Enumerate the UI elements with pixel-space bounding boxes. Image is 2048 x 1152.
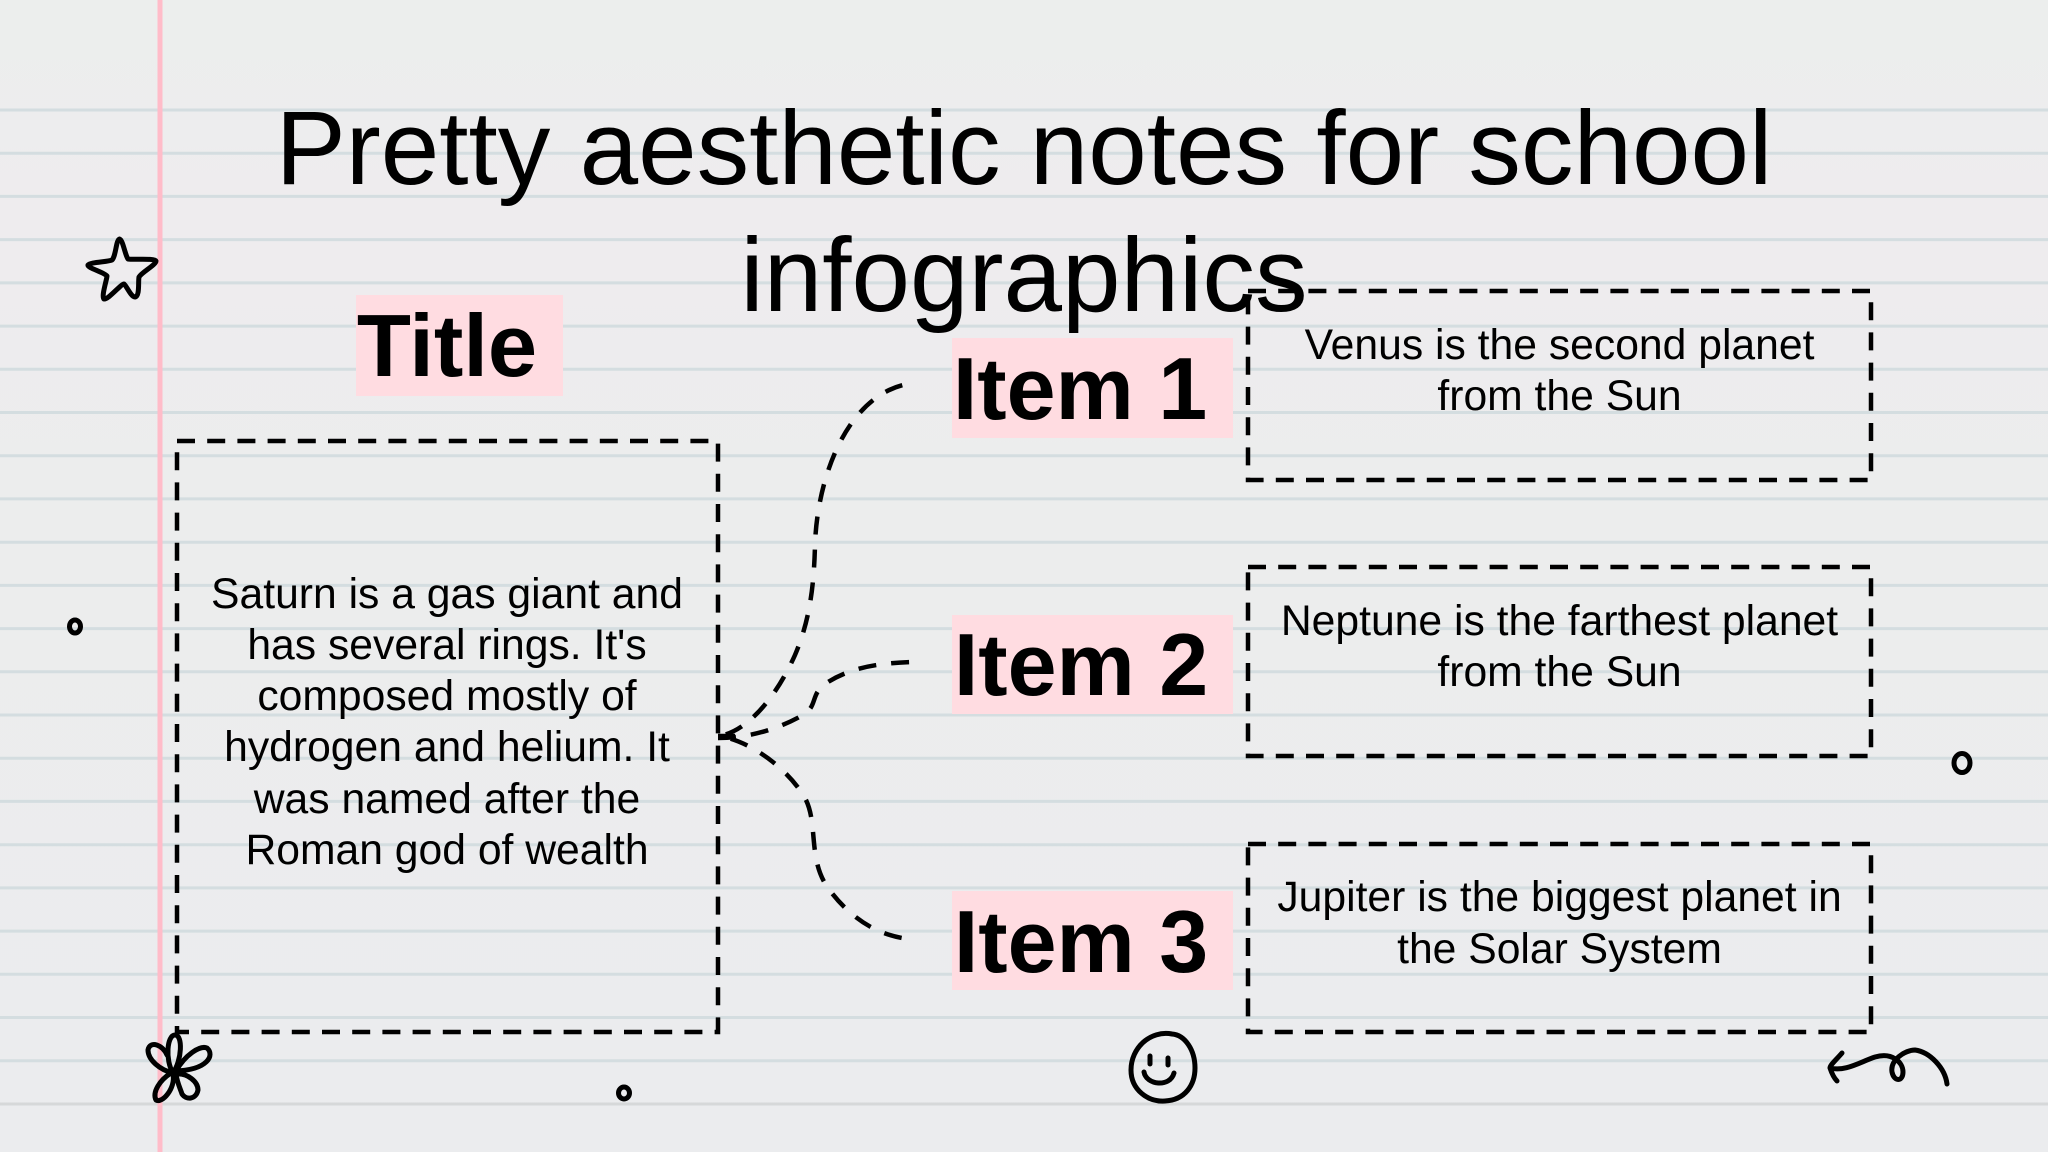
item 3: Item 3 — [954, 892, 1208, 991]
text block: Saturn: Roman god of wealth — [245, 826, 649, 874]
heading: Title: Title — [357, 296, 537, 395]
title: infographics — [740, 217, 1308, 334]
icon: smiley — [1131, 1033, 1195, 1101]
text block: Saturn: was named after the — [253, 775, 640, 823]
panel: Jupiter: the Solar System — [1397, 925, 1722, 973]
icon: flower — [148, 1035, 210, 1101]
text block: Saturn: has several rings. It's — [247, 621, 647, 669]
item 1: Item 1 — [953, 339, 1207, 438]
icon: small circle right — [1954, 754, 1970, 772]
icon: small circle left — [70, 620, 80, 633]
panel: Jupiter — [1248, 844, 1871, 1032]
panel: Venus: Venus is the second planet — [1305, 321, 1815, 369]
panel: Neptune: from the Sun — [1437, 648, 1682, 696]
heading pink highlight: Title — [356, 295, 563, 396]
panel: Neptune: Neptune is the farthest planet — [1281, 597, 1838, 645]
text block: Saturn: Saturn is a gas giant and — [211, 570, 683, 618]
panel: Venus — [1248, 291, 1871, 480]
panel: Neptune — [1248, 567, 1871, 756]
icon: small circle bottom — [618, 1087, 630, 1099]
title: Pretty aesthetic notes for school — [276, 90, 1772, 207]
panel: main text box — [177, 441, 718, 1032]
panel: Jupiter: Jupiter is the biggest planet in — [1277, 873, 1842, 921]
panel: Venus: from the Sun — [1437, 372, 1682, 420]
icon: squiggle arrow — [1830, 1050, 1947, 1084]
item 2: Item 2 — [954, 615, 1208, 714]
text block: Saturn: composed mostly of — [257, 672, 637, 720]
connector arrows — [718, 385, 912, 938]
text block: Saturn: hydrogen and helium. It — [224, 723, 670, 771]
icon: star — [88, 239, 156, 299]
